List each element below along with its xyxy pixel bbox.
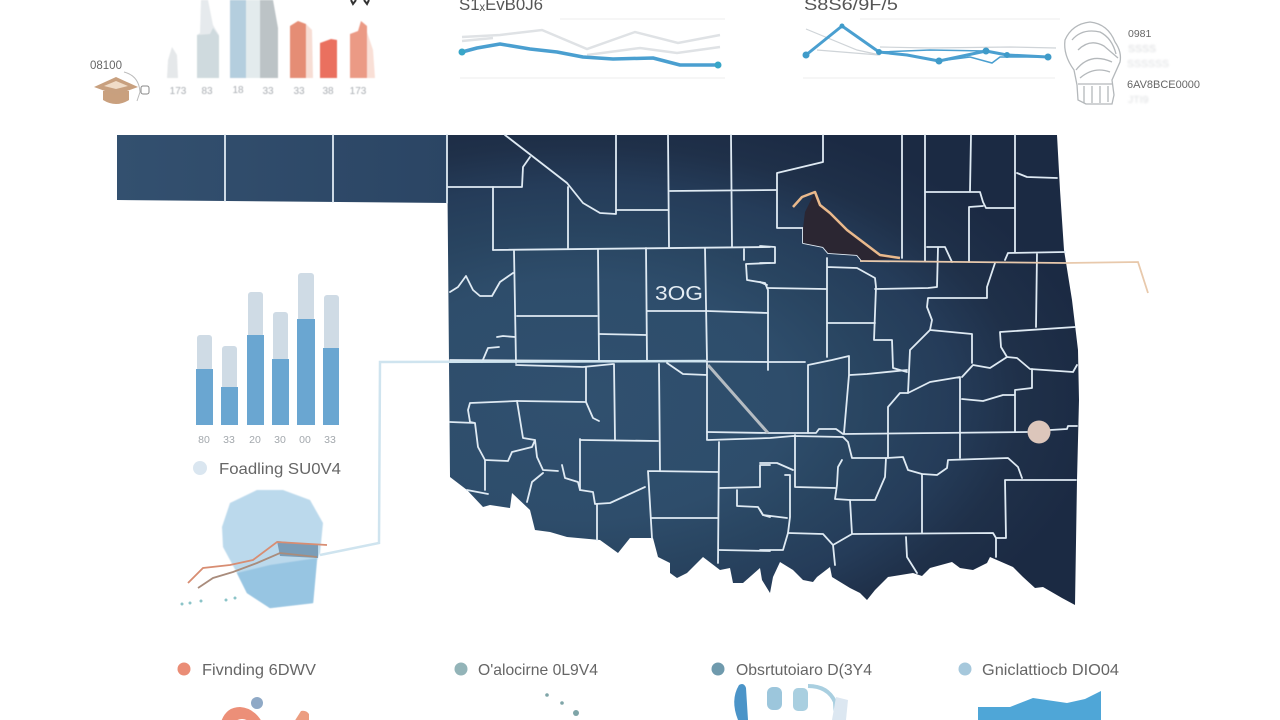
icon: blue device, cropped at bottom (734, 684, 848, 720)
text block: head icon notes: 0981 (1128, 28, 1152, 40)
legend: left chart: Foadling SU0V4 (219, 461, 341, 478)
axis labels: 20 (249, 434, 261, 446)
bar 3 (247, 292, 264, 425)
panel: top centre line chart (458, 0, 725, 78)
axis labels: 80 (198, 434, 210, 446)
highlighted county (803, 192, 900, 261)
top edge dark marks (351, 0, 369, 4)
bars: grey group (167, 0, 219, 78)
state body (447, 135, 1079, 605)
bar axis labels: 38 (322, 86, 334, 97)
panel: left stacked bar chart (196, 273, 339, 446)
grey series (806, 29, 1056, 55)
icon: coral figure, cropped at bottom (221, 697, 309, 720)
icon: blue head with tan lines (180, 490, 327, 608)
axis labels: 33 (223, 434, 235, 446)
legend: funding: Fivnding 6DWV (202, 662, 316, 679)
bar axis labels: 18 (232, 85, 244, 96)
bar axis labels: 33 (262, 86, 274, 97)
legend: fourth item: Gniclattiocb DIO04 (982, 662, 1119, 679)
callout arrow: right tan leader line (860, 261, 1148, 293)
legend: third item: Obsrtutoiaro D(3Y4 (736, 662, 872, 679)
axis labels: 30 (274, 434, 286, 446)
callout arrow: left blue leader line (320, 361, 706, 555)
map centre label: 3OG (655, 283, 703, 305)
axis labels: 33 (324, 434, 336, 446)
text block: head icon notes: SSSS (1128, 43, 1156, 55)
blue series (806, 26, 1048, 63)
text block: head icon notes (1127, 28, 1200, 106)
county borders (225, 135, 1077, 573)
blue series (458, 44, 722, 68)
panhandle (117, 135, 448, 203)
bar 6 (323, 295, 339, 425)
bar axis labels (170, 85, 367, 97)
text block: head icon notes: SSSSSS (1127, 58, 1169, 70)
axis labels (198, 434, 336, 446)
legend: second item: O'alocirne 0L9V4 (478, 662, 598, 679)
icon: graduation cap with label (90, 60, 149, 104)
data points (802, 24, 1052, 64)
bar axis labels: 173 (350, 86, 367, 97)
bar axis labels: 83 (201, 86, 213, 97)
bar axis labels: 173 (170, 86, 187, 97)
icon: graduation cap with label: 08100 (90, 60, 122, 72)
bar 2 (221, 346, 238, 425)
highlight outline (793, 192, 900, 258)
grey series (462, 30, 720, 55)
text block: head icon notes: 6AV8BCE0000 (1127, 79, 1200, 91)
axis labels: 00 (299, 434, 311, 446)
marker: tan circle (1028, 420, 1050, 444)
bar 1 (196, 335, 213, 425)
text block: head icon notes: JTI9 (1128, 94, 1149, 106)
map: Oklahoma counties (117, 135, 1079, 605)
bar 4 (272, 312, 289, 425)
panel: top left bar chart (167, 0, 375, 97)
icon: teal dots (545, 693, 579, 716)
bars: blue and grey columns (230, 0, 278, 78)
panel: top right line chart (802, 0, 1060, 78)
bar 5 (297, 273, 315, 425)
diagonal grey connector (708, 365, 768, 433)
icon: head outline with brain (1065, 22, 1120, 104)
icon: blue wave block, cropped at bottom (978, 691, 1101, 720)
bars: coral columns (290, 21, 375, 78)
bar axis labels: 33 (293, 86, 305, 97)
